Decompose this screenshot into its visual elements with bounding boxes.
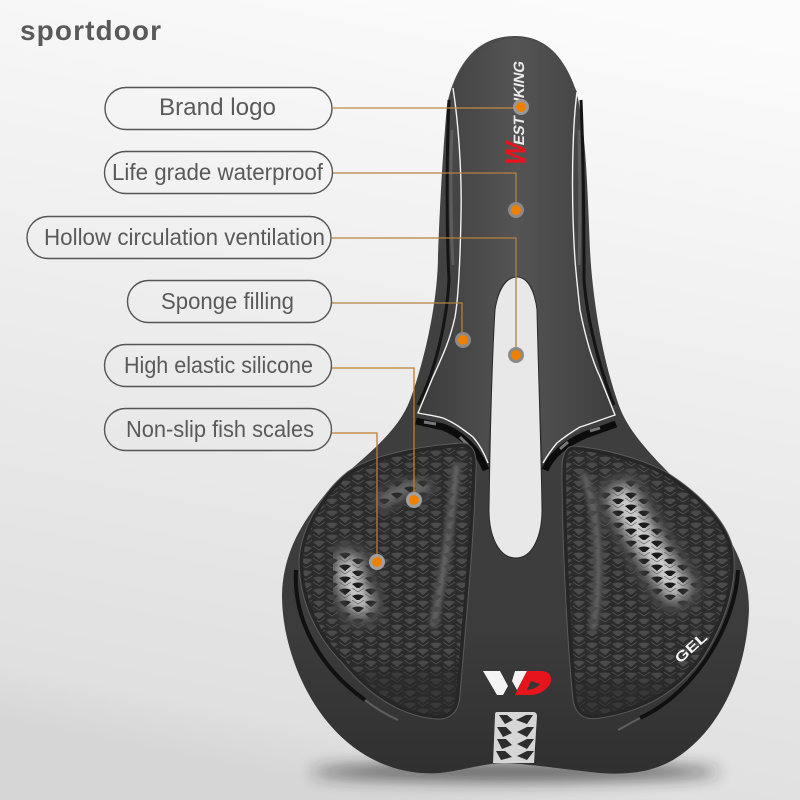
callout: Non-slip fish scales: [104, 408, 385, 570]
GEL mark: GEL: [671, 629, 711, 666]
ventilation slot: [489, 277, 542, 558]
pad rims and grooves: [296, 447, 738, 730]
saddle body: [282, 36, 749, 774]
side strips: [416, 100, 616, 470]
brand mark: WD logo: [483, 671, 551, 695]
callout: Brand logo: Brand logo: [159, 94, 276, 121]
saddle: [282, 36, 749, 781]
callout: High elastic silicone: [104, 344, 422, 508]
callout: Non-slip fish scales: Non-slip fish scales: [126, 416, 314, 442]
callout: Life grade waterproof: [104, 152, 524, 218]
callout: Sponge filling: Sponge filling: [161, 288, 294, 314]
rear grille: [493, 712, 537, 763]
left gel pad: [303, 447, 472, 716]
white piping: [418, 88, 615, 463]
nose logo: WEST BIKING: W: [499, 138, 532, 168]
nose logo: WEST BIKING: EST BIKING: [511, 59, 528, 147]
brand name: sportdoor: [20, 15, 161, 46]
right gel pad: [566, 450, 730, 715]
callout: Brand logo: [105, 88, 529, 130]
ground shadow: [310, 763, 720, 781]
nose top panel: [418, 38, 615, 463]
callout: Life grade waterproof: Life grade waterproof: [112, 159, 324, 185]
callout: Sponge filling: [128, 280, 471, 348]
nose logo: WEST BIKING: [499, 59, 532, 168]
callout: Hollow circulation ventilation: Hollow circulation ventilation: [44, 224, 325, 250]
callout: High elastic silicone: High elastic silicone: [124, 352, 313, 378]
callout: Hollow circulation ventilation: [27, 216, 524, 363]
